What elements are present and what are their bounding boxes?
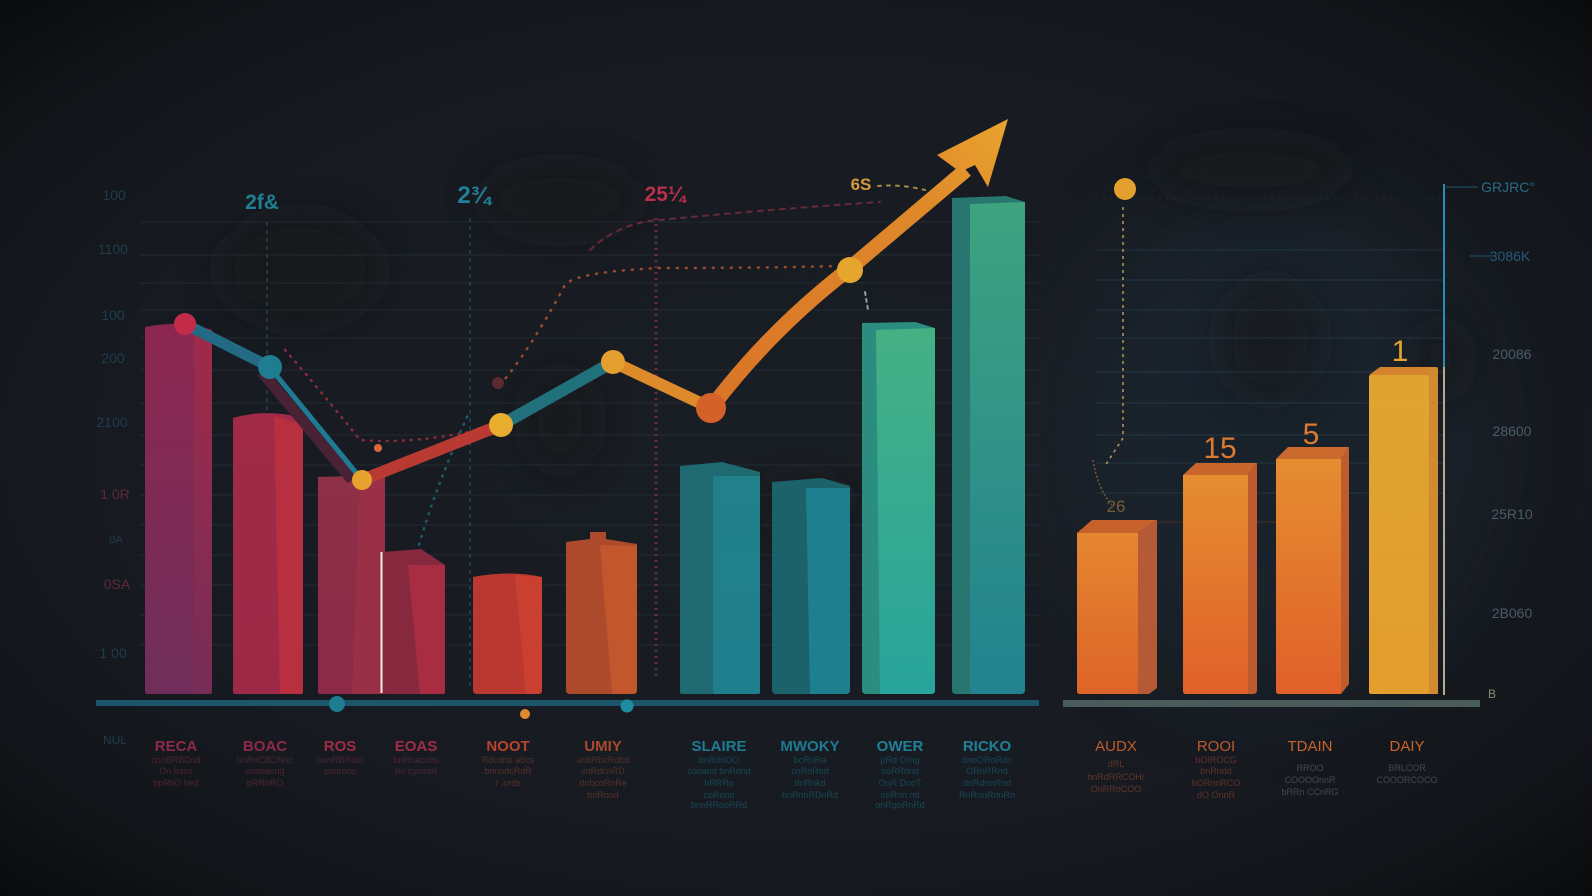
right axis labels: 25R10 — [1491, 506, 1533, 522]
left axis labels: 100 — [101, 307, 125, 323]
label column 8: bcRnRa — [794, 755, 826, 765]
bar value labels — [1203, 335, 1408, 465]
bar 2 — [233, 413, 303, 694]
label column 9 — [875, 738, 925, 810]
label column 13 — [1281, 738, 1339, 797]
segment: blue to yellow — [262, 370, 362, 480]
top value labels: 2¾ — [457, 182, 493, 209]
middle bar group: teal — [680, 196, 1025, 694]
label column 14 — [1376, 738, 1438, 785]
label column 7: coRooo — [703, 790, 735, 800]
label column 1: cnoBRBDnd — [151, 755, 201, 765]
label column 9: ooRRdnd — [881, 766, 919, 776]
label column 6: dnbcoRnRe — [579, 778, 627, 788]
left axis labels — [96, 187, 131, 747]
grid lines — [140, 198, 1444, 645]
right axis labels: GRJRC° — [1481, 179, 1535, 195]
label column 7: SLAIRE — [691, 738, 747, 755]
label column 11: AUDX — [1095, 738, 1137, 755]
label column 12: dO OnnR — [1197, 790, 1236, 800]
right axis labels — [1481, 179, 1535, 621]
label column 12 — [1192, 738, 1240, 800]
label column 7: bRRRo — [704, 778, 734, 788]
label column 6 — [577, 738, 629, 800]
label column 6: anbRbcRdbd — [577, 755, 629, 765]
bar 7 — [680, 462, 760, 694]
top value labels: 2f& — [245, 191, 279, 214]
bar value labels: 15 — [1203, 432, 1237, 465]
right bar group: orange — [1077, 367, 1438, 694]
label column 5: bnnodcRdR — [484, 766, 532, 776]
label column 13: TDAIN — [1288, 738, 1332, 755]
bar 3 — [318, 475, 385, 694]
left axis labels: 0A — [109, 534, 123, 546]
category labels — [151, 738, 1438, 810]
arrow head — [937, 119, 1008, 187]
label column 9: OWER — [877, 738, 923, 755]
label column 8: MWOKY — [780, 738, 840, 755]
background blotches — [220, 140, 1465, 525]
label column 12: bOIROCG — [1195, 755, 1237, 765]
bar 4 — [382, 549, 445, 694]
segment: red to blue — [185, 324, 270, 367]
label column 11 — [1087, 738, 1145, 794]
label column 7: bnRdnOO — [699, 755, 739, 765]
label column 8: bnRnnRDnRd — [782, 790, 838, 800]
label column 2: bRRoRO — [247, 778, 283, 788]
right axis labels: 2B060 — [1492, 605, 1532, 621]
label column 10: RnRnnRnnRn — [959, 790, 1015, 800]
label column 10 — [959, 738, 1015, 800]
top value labels: 6S — [851, 175, 871, 194]
label column 14: DAIY — [1389, 738, 1425, 755]
label column 1: On bass — [159, 766, 193, 776]
label column 5: NOOT — [486, 738, 530, 755]
label column 8 — [780, 738, 840, 800]
label column 14: BRLCOR — [1388, 763, 1426, 773]
label column 12: ROOI — [1197, 738, 1235, 755]
label column 9: pRd Orng — [880, 755, 920, 765]
label column 4: bo cynoad — [395, 766, 437, 776]
top value labels — [245, 175, 871, 214]
bar value labels: 1 — [1392, 335, 1408, 368]
label column 9: onRgoRnRd — [875, 800, 925, 810]
trend line with arrow — [185, 170, 966, 480]
left axis labels: 1100 — [98, 241, 128, 257]
left axis labels: 2100 — [96, 414, 128, 430]
label column 1: bpRtiO bed — [153, 778, 199, 788]
left axis labels: 200 — [101, 350, 125, 366]
right panel marker and leader — [1093, 178, 1136, 516]
arrow shaft — [711, 170, 966, 408]
right panel marker and leader: 26 — [1107, 497, 1125, 516]
segment: teal rising — [501, 362, 613, 425]
left axis labels: 100 — [102, 187, 126, 203]
label column 2: cnnbasng — [245, 766, 285, 776]
bar 1 — [145, 324, 212, 694]
label column 2: bnRdCBDNnc — [237, 755, 294, 765]
label column 6: UMIY — [584, 738, 622, 755]
label column 3: ROS — [324, 738, 356, 755]
right axis labels: 3086K — [1490, 248, 1531, 264]
label column 7: cooand bnRdnd — [687, 766, 751, 776]
label column 10: dnoORoRdn — [962, 755, 1012, 765]
right axis labels: 28600 — [1493, 423, 1532, 439]
label column 5 — [482, 738, 535, 788]
label column 8: cnRdRod — [791, 766, 829, 776]
left bar group: crimson — [145, 324, 637, 694]
label column 4: EOAS — [395, 738, 437, 755]
label column 11: OnRRoCOO — [1091, 784, 1141, 794]
label column 7: bnnRRooRRd — [691, 800, 747, 810]
label column 10: ORnRRnd — [966, 766, 1008, 776]
bar 13 — [1276, 447, 1349, 694]
left axis labels: 0SA — [104, 576, 131, 592]
label column 10: RICKO — [963, 738, 1011, 755]
bar value labels: 5 — [1303, 418, 1319, 451]
right panel bluish glow — [1060, 200, 1480, 680]
highlight line on bar 4 — [380, 552, 382, 693]
bar 8 — [772, 478, 850, 694]
segment: yellow to yellow, red — [362, 425, 501, 480]
label column 8: dnRnkd — [794, 778, 826, 788]
right axis labels: 20086 — [1493, 346, 1532, 362]
label column 2 — [237, 738, 294, 788]
top value labels: 25¼ — [645, 183, 687, 206]
label column 3: cooroco — [324, 766, 356, 776]
label column 1 — [151, 738, 201, 788]
bar 9 — [862, 322, 935, 694]
label column 7 — [687, 738, 751, 810]
label column 6: cnRdcnRD — [581, 766, 625, 776]
label column 9: OnR DooT — [878, 778, 922, 788]
bar 5 — [473, 574, 542, 694]
label column 3: bonRBRdin — [317, 755, 363, 765]
label column 10: dnRdnoRnd — [963, 778, 1011, 788]
label column 5: Rdcdnb abcs — [482, 755, 535, 765]
label column 11: bnRdRRCOHr — [1087, 772, 1145, 782]
left axis labels: 1 0R — [100, 486, 130, 502]
bar 14 — [1369, 367, 1438, 694]
label column 3 — [317, 738, 363, 776]
left axis labels: NUL — [103, 733, 127, 747]
label column 1: RECA — [155, 738, 197, 755]
dotted trend curves — [285, 186, 925, 560]
baseline axes: B — [1488, 687, 1496, 701]
label column 2: BOAC — [243, 738, 287, 755]
label column 9: ooRnn nd — [880, 790, 920, 800]
label column 4 — [393, 738, 439, 776]
label column 13: RROO — [1296, 763, 1324, 773]
bar 12 — [1183, 463, 1257, 694]
label column 11: dRL — [1108, 759, 1124, 769]
bar 6 — [566, 532, 637, 694]
bar 10 — [952, 196, 1025, 694]
label column 6: boRond — [587, 790, 619, 800]
label column 12: bnRndd — [1200, 766, 1232, 776]
label column 12: bORnnRCO — [1192, 778, 1240, 788]
data nodes — [174, 257, 863, 490]
bar 11 — [1077, 520, 1157, 694]
label column 13: COOOOnnR — [1284, 775, 1336, 785]
small data dots — [374, 377, 504, 452]
left axis labels: 1 00 — [99, 645, 127, 661]
label column 13: bRRn CCnRG — [1281, 787, 1339, 797]
baseline axes — [96, 687, 1496, 719]
segment: orange dip — [613, 362, 711, 408]
label column 14: COOORCOCO — [1376, 775, 1438, 785]
vertical reference lines — [267, 218, 656, 690]
vertical right axis — [1444, 184, 1492, 695]
label column 4: bnRnacobs — [393, 755, 439, 765]
label column 5: r .ords — [495, 778, 521, 788]
